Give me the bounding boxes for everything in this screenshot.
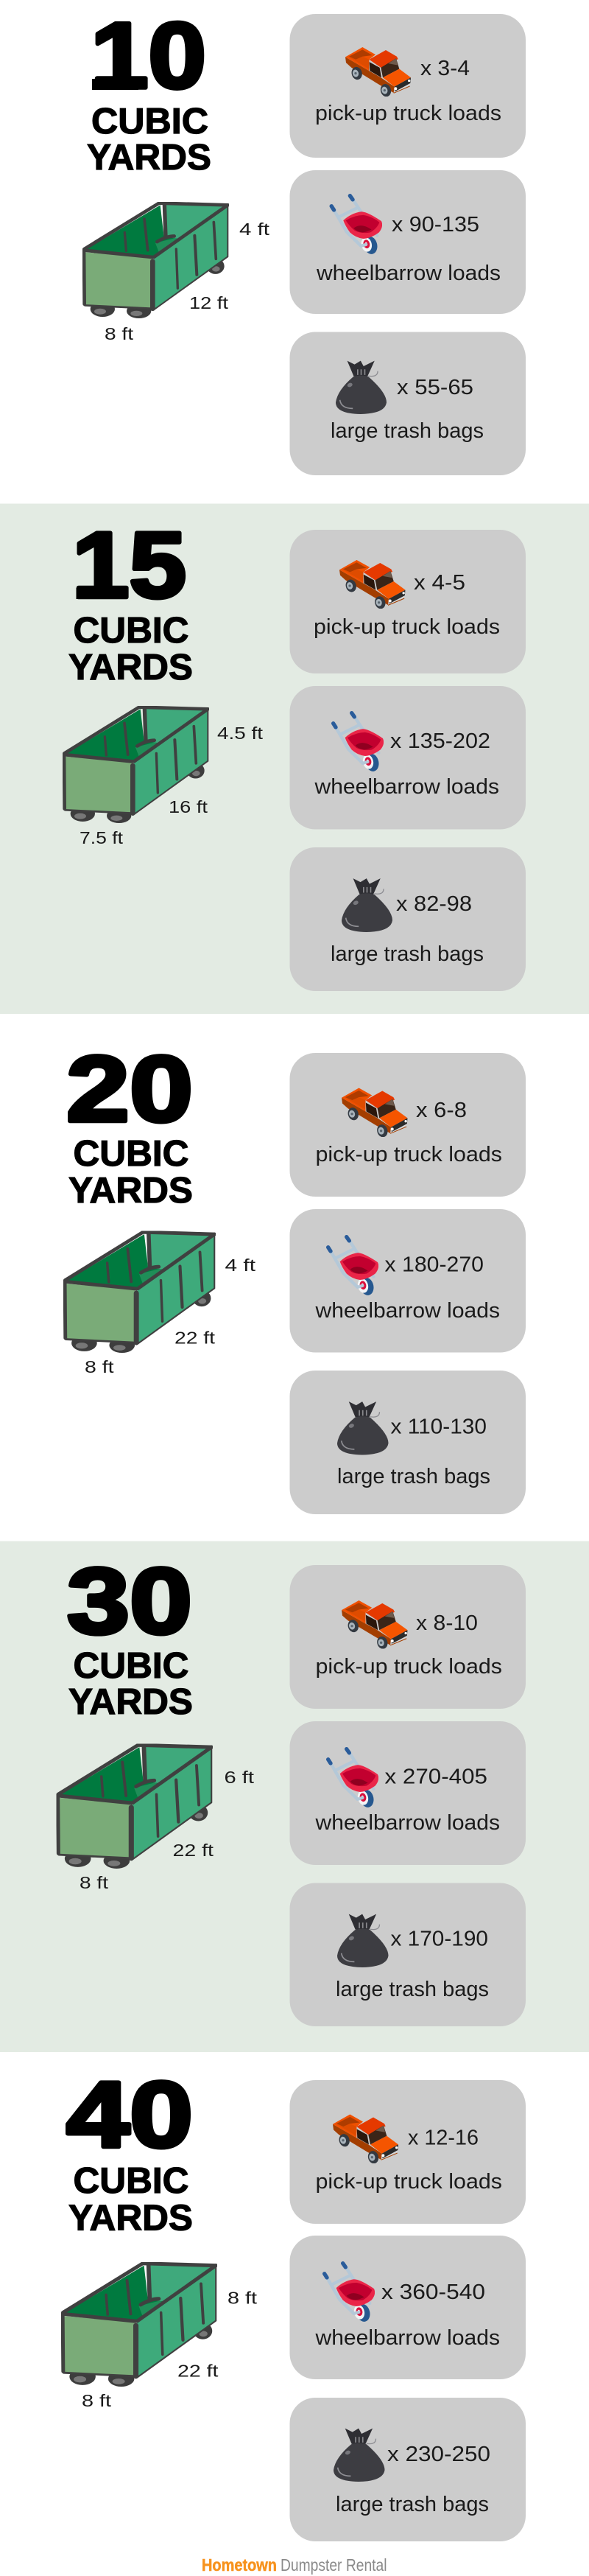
count: truck loads: x 4-5 [414, 571, 465, 595]
panel: large trash bags [290, 847, 526, 991]
dimension labels [80, 724, 264, 847]
label: trash bags: large trash bags [336, 1978, 489, 2001]
icon: trash bag [342, 878, 392, 932]
dimension labels: 8 ft [85, 1357, 114, 1376]
heading number 30: 30 [67, 1549, 192, 1653]
icon: wheelbarrow [331, 196, 382, 256]
icon: wheelbarrow [325, 2264, 375, 2323]
count: trash bags: x 110-130 [390, 1415, 487, 1438]
icon: pick-up truck [342, 1600, 408, 1650]
heading number 10: 10 [91, 3, 206, 108]
label: trash bags: large trash bags [337, 1465, 490, 1488]
logo: Hometown Dumpster Rental [202, 2555, 387, 2575]
panel: wheelbarrow loads [290, 2236, 526, 2379]
label: wheelbarrow: wheelbarrow loads [316, 262, 501, 285]
count: trash bags: x 55-65 [397, 376, 473, 399]
dimension labels: 22 ft [177, 2361, 219, 2380]
count: wheelbarrow loads: x 180-270 [384, 1253, 484, 1276]
label: trash bags: large trash bags [336, 2493, 489, 2516]
icon: trash bag [334, 2429, 384, 2482]
heading: cubic yards [68, 2161, 193, 2239]
dumpster illustration 40 yards [63, 2264, 216, 2387]
panel: wheelbarrow loads [290, 170, 526, 314]
icon: trash bag [337, 1401, 389, 1455]
background band [0, 504, 589, 1014]
heading: cubic yards: CUBIC [74, 1646, 188, 1686]
dumpster illustration 15 yards [64, 707, 208, 823]
count: wheelbarrow loads: x 270-405 [384, 1765, 487, 1789]
heading: cubic yards [68, 611, 193, 687]
label: trash bags: large trash bags [331, 942, 484, 966]
count: truck loads: x 3-4 [420, 57, 470, 80]
heading: cubic yards [68, 1646, 193, 1722]
dumpster illustration 20 yards [65, 1232, 214, 1353]
dumpster illustration 10 yards [84, 203, 228, 318]
count: truck loads: x 6-8 [416, 1099, 467, 1122]
label: truck: pick-up truck loads [315, 1655, 502, 1679]
heading: cubic yards [87, 102, 211, 178]
count: truck loads: x 12-16 [408, 2127, 479, 2150]
icon: trash bag [337, 1914, 389, 1967]
heading: cubic yards: CUBIC [74, 611, 188, 651]
panel: large trash bags [290, 332, 526, 475]
dimension labels: 8 ft [228, 2289, 258, 2308]
dimension labels: 22 ft [172, 1841, 214, 1860]
label: wheelbarrow: wheelbarrow loads [314, 2326, 500, 2350]
heading number 20: 20 [66, 1036, 193, 1141]
count: wheelbarrow loads: x 135-202 [390, 729, 490, 753]
dimension labels: 8 ft [82, 2391, 112, 2410]
heading number 40: 40 [66, 2062, 193, 2166]
panel: pick-up truck loads [290, 14, 526, 158]
panel: pick-up truck loads [290, 530, 526, 673]
dumpster illustration 30 yards [58, 1745, 211, 1869]
label: trash bags: large trash bags [331, 419, 484, 443]
heading: cubic yards: YARDS [68, 1171, 193, 1211]
section: 10 cubic yards [84, 3, 526, 475]
label: wheelbarrow: wheelbarrow loads [314, 1811, 500, 1835]
logo: Hometown Dumpster Rental: Hometown [202, 2555, 277, 2575]
icon: pick-up truck [339, 560, 405, 610]
label: truck: pick-up truck loads [314, 615, 500, 639]
label: wheelbarrow: wheelbarrow loads [314, 1299, 500, 1323]
icon: wheelbarrow [328, 1749, 378, 1809]
label: wheelbarrow: wheelbarrow loads [314, 775, 499, 799]
dimension labels: 22 ft [174, 1328, 216, 1347]
heading number 15: 15 [72, 513, 186, 617]
label: truck: pick-up truck loads [315, 102, 501, 125]
section: 20 cubic yards [65, 1036, 526, 1514]
panel: wheelbarrow loads [290, 1209, 526, 1353]
dimension labels: 4 ft [239, 220, 270, 239]
panel: wheelbarrow loads [290, 686, 526, 830]
count: trash bags: x 82-98 [396, 892, 472, 916]
panel: large trash bags [290, 2398, 526, 2541]
heading: cubic yards: CUBIC [74, 2161, 188, 2201]
heading: cubic yards: YARDS [68, 648, 193, 687]
panel: pick-up truck loads [290, 1053, 526, 1197]
heading: cubic yards [68, 1134, 193, 1211]
dimension labels: 7.5 ft [80, 828, 124, 847]
count: wheelbarrow loads: x 90-135 [392, 213, 479, 237]
background band [0, 1541, 589, 2052]
icon: trash bag [336, 361, 387, 414]
section: 30 cubic yards [0, 1541, 589, 2052]
icon: pick-up truck [345, 47, 411, 98]
heading: cubic yards: CUBIC [91, 102, 208, 141]
count: trash bags: x 230-250 [387, 2443, 490, 2466]
heading: cubic yards: YARDS [68, 2199, 193, 2239]
dimension labels: 6 ft [224, 1768, 255, 1787]
count: wheelbarrow loads: x 360-540 [381, 2281, 485, 2304]
dimension labels: 12 ft [189, 293, 229, 312]
panel: pick-up truck loads [290, 1565, 526, 1709]
panel: large trash bags [290, 1371, 526, 1514]
logo: Hometown Dumpster Rental: Dumpster Rental [281, 2555, 387, 2575]
section: 15 cubic yards [0, 504, 589, 1014]
dimension labels: 16 ft [169, 797, 208, 816]
heading: cubic yards: YARDS [87, 138, 211, 178]
heading: cubic yards: CUBIC [74, 1134, 188, 1174]
dimension labels: 4 ft [225, 1256, 256, 1275]
panel: wheelbarrow loads [290, 1721, 526, 1865]
label: truck: pick-up truck loads [315, 2170, 502, 2194]
dimension labels [105, 220, 270, 343]
heading: cubic yards: YARDS [68, 1682, 193, 1722]
icon: wheelbarrow [328, 1237, 378, 1297]
panel: pick-up truck loads [290, 2080, 526, 2224]
label: truck: pick-up truck loads [315, 1143, 502, 1166]
dimension labels: 8 ft [80, 1873, 109, 1892]
panel: large trash bags [290, 1883, 526, 2026]
dimension labels [82, 2289, 258, 2410]
dimension labels [80, 1768, 255, 1892]
icon: wheelbarrow [334, 713, 384, 773]
count: truck loads: x 8-10 [416, 1611, 478, 1635]
section: 40 cubic yards [63, 2062, 526, 2541]
dimension labels [85, 1256, 256, 1376]
dimension labels: 8 ft [105, 324, 134, 343]
icon: pick-up truck [342, 1088, 408, 1138]
dimension labels: 4.5 ft [217, 724, 264, 743]
icon: pick-up truck [333, 2115, 398, 2165]
count: trash bags: x 170-190 [390, 1928, 488, 1951]
